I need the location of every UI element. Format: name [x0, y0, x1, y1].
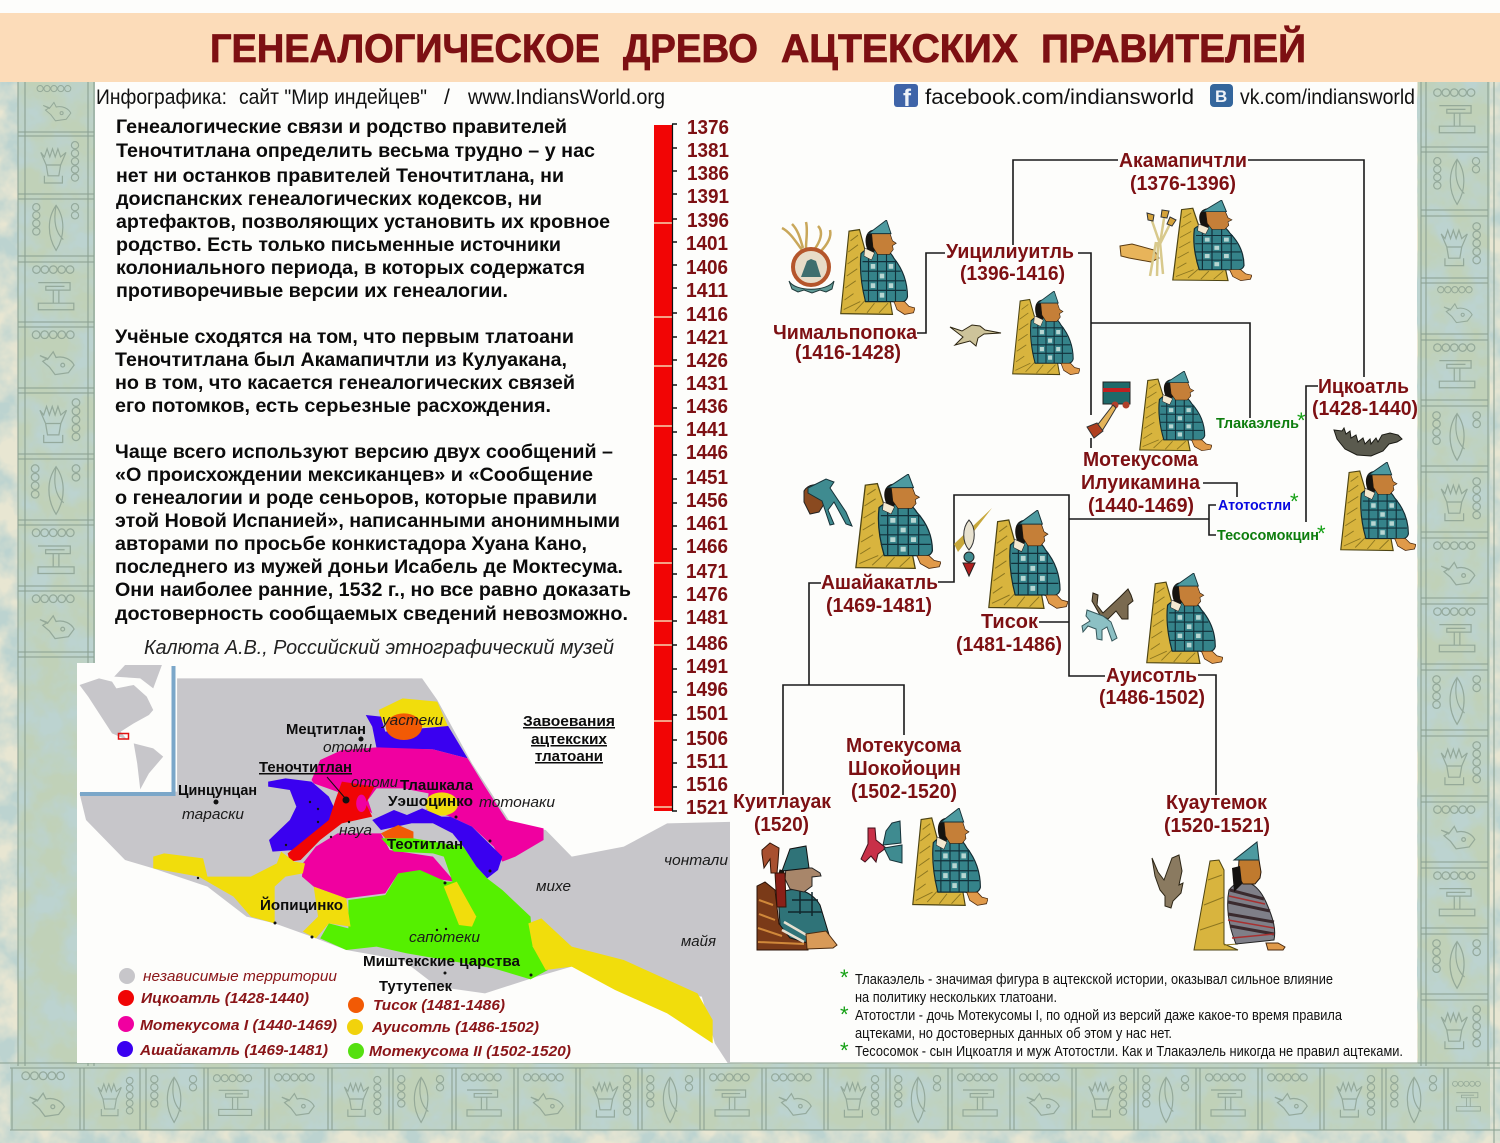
social links [894, 84, 1415, 112]
paragraph 1: Генеалогические связи и родство правителей [116, 117, 567, 138]
city labels: Теночтитлан [259, 759, 352, 776]
icon: facebook [894, 84, 918, 112]
icon: face with water [804, 479, 852, 526]
timeline years: 1521 [686, 797, 728, 819]
timeline years: 1441 [686, 419, 728, 441]
ruler: Itzcoatl: (1428-1440) [1312, 398, 1418, 420]
icon: hummingbird [950, 325, 1001, 346]
icon: diadem and arrow [1087, 382, 1130, 438]
timeline years: 1491 [686, 656, 728, 678]
Ahuitzotl territory: Huexotzinco [425, 792, 458, 816]
timeline years: 1391 [687, 186, 729, 208]
figure: seated ruler [841, 220, 915, 314]
sibling: Atotoztli: Атотостли [1218, 498, 1291, 514]
city labels: Теотитлан [387, 836, 463, 853]
ruler: Tizoc: Тисок [981, 611, 1039, 633]
sibling: Tezozomoctzin [1217, 521, 1326, 546]
icon: smoking shield [782, 222, 834, 293]
timeline years: 1396 [687, 210, 729, 232]
Ahuitzotl territory: isthmus [444, 882, 476, 927]
ruler: Tizoc: (1481-1486) [956, 634, 1062, 656]
title: ДРЕВО [623, 27, 758, 71]
footnotes: * [840, 1038, 849, 1063]
paragraph 2 [115, 327, 575, 417]
figure: seated ruler [1173, 200, 1252, 281]
timeline years: 1376 [687, 117, 729, 139]
ruler: Motecuhzoma Xocoyotzin: Мотекусома [846, 735, 962, 757]
source line: сайт "Мир индейцев" [239, 86, 427, 109]
independent land [80, 678, 740, 1070]
paragraph 3: этой Новой Испанией», написанными анонимными [115, 511, 620, 532]
footnotes: Тлакаэлель - значимая фигура в ацтекской истории, оказывал сильное влияние [855, 972, 1333, 988]
people labels: майя [681, 933, 716, 950]
author credit: Калюта А.В., Российский этнографический музей [144, 637, 614, 659]
ruler: Cuauhtemoc: Куаутемок [1166, 792, 1268, 814]
timeline years: 1511 [686, 751, 728, 773]
timeline [654, 117, 729, 819]
people labels: отоми [351, 774, 399, 791]
timeline years: 1431 [686, 373, 728, 395]
icon: vk [1210, 84, 1233, 107]
ruler: Acamapichtli: (1376-1396) [1130, 173, 1236, 195]
timeline years: 1401 [686, 233, 728, 255]
icon: facebook: f [903, 85, 912, 112]
paragraph 2: Учёные сходятся на том, что первым тлатоани [115, 327, 574, 348]
title [210, 25, 1306, 71]
family tree connector lines [783, 160, 1364, 795]
figure: seated ruler [1341, 462, 1416, 550]
timeline years: 1481 [686, 607, 728, 629]
ruler: Huitzilihuitl [946, 241, 1080, 375]
paragraph 2: его потомков, есть серьезные расхождения. [115, 396, 551, 417]
timeline years: 1426 [686, 350, 728, 372]
ruler: Chimalpopoca [773, 220, 918, 364]
ruler: Chimalpopoca: Чимальпопока [773, 322, 918, 344]
map legend [117, 968, 571, 1060]
city labels: Миштекские царства [363, 953, 521, 970]
map legend: Ашайакатль (1469-1481) [139, 1042, 328, 1059]
ruler: Axayacatl [804, 474, 941, 617]
timeline years: 1436 [686, 396, 728, 418]
timeline years: 1451 [686, 467, 728, 489]
city labels: Тлашкала [400, 777, 474, 794]
ruler: Axayacatl: Ашайакатль [821, 572, 938, 594]
figure: seated ruler [1013, 291, 1080, 375]
ruler: Acamapichtli: Акамапичтли [1119, 150, 1247, 172]
people labels [182, 712, 729, 950]
Tizoc territory: centre [381, 825, 413, 838]
city labels: Цинцунцан [178, 782, 257, 799]
timeline years: 1386 [687, 163, 729, 185]
icon: obsidian serpent [1334, 428, 1402, 456]
timeline years: 1516 [686, 774, 728, 796]
ruler: Acamapichtli [1119, 150, 1252, 281]
paragraph 2: Теночтитлана был Акамапичтли из Кулуакана, [115, 350, 567, 371]
ruler: Huitzilihuitl: Уицилиуитль [946, 241, 1074, 263]
sibling: Tezozomoctzin: * [1317, 521, 1326, 546]
source line: / [444, 86, 450, 109]
figure: seated ruler [856, 474, 941, 568]
ruler: Chimalpopoca: (1416-1428) [795, 342, 901, 364]
source line: Инфографика: [96, 86, 227, 109]
timeline years: 1476 [686, 584, 728, 606]
sibling: Tlacaelel: * [1297, 408, 1306, 433]
title band [0, 13, 1500, 82]
paragraph 1: нет ни останков правителей Теночтитлана, ни [116, 166, 564, 187]
icon: hand holding reeds [1120, 210, 1176, 276]
sibling: Atotoztli [1218, 489, 1299, 514]
ruler: Motecuhzoma Ilhuicamina: (1440-1469) [1088, 495, 1194, 517]
sibling: Tlacaelel: Тлакаэлель [1216, 416, 1299, 432]
figure: ruler in striped cloak [1194, 842, 1285, 950]
map heading: тлатоани [535, 748, 603, 765]
footnotes: * [840, 965, 849, 990]
timeline years: 1471 [686, 561, 728, 583]
title: ПРАВИТЕЛЕЙ [1041, 25, 1306, 71]
paragraph 3: о генеалогии и роде сеньоров, которые правили [115, 488, 597, 509]
icon: vk: В [1215, 87, 1227, 106]
map legend: Мотекусома I (1440-1469) [140, 1017, 337, 1034]
social links: facebook.com/indiansworld [925, 86, 1194, 109]
icon: descending eagle [1152, 855, 1183, 908]
sibling: Atotoztli: * [1290, 489, 1299, 514]
map legend: Мотекусома II (1502-1520) [369, 1043, 571, 1060]
Motecuhzoma II territory [320, 838, 548, 979]
city labels: Уэшоцинко [388, 793, 473, 810]
Ahuitzotl territory: north [379, 698, 448, 728]
source line: www.IndiansWorld.org [467, 86, 665, 109]
ruler: Motecuhzoma Xocoyotzin: (1502-1520) [851, 781, 957, 803]
timeline years: 1406 [686, 257, 728, 279]
timeline years: 1456 [686, 490, 728, 512]
map legend: Тисок (1481-1486) [373, 997, 505, 1014]
Oaxaca independent enclave [411, 823, 454, 836]
paragraph 3 [115, 442, 631, 625]
footnotes: на политику нескольких тлатоани. [855, 990, 1057, 1006]
timeline years: 1421 [686, 327, 728, 349]
timeline years: 1501 [686, 703, 728, 725]
timeline years: 1486 [686, 633, 728, 655]
icon: diadem and nose ornament [861, 821, 902, 863]
ruler: Motecuhzoma Xocoyotzin: Шокойоцин [848, 758, 961, 780]
ruler: Cuitlahuac: (1520) [754, 814, 809, 836]
ruler: Cuitlahuac [733, 791, 837, 950]
footnotes: ацтеками, но достоверных данных об этом у нас нет. [855, 1026, 1172, 1042]
ruler: Ahuitzotl: (1486-1502) [1099, 687, 1205, 709]
city markers [197, 736, 533, 976]
people labels: науа [339, 822, 372, 839]
paragraph 1: артефактов, позволяющих установить их кровное [116, 212, 610, 233]
ruler: Huitzilihuitl: (1396-1416) [960, 263, 1065, 285]
ruler: Motecuhzoma Ilhuicamina: Мотекусома [1083, 449, 1199, 471]
sibling: Tezozomoctzin: Тесосомокцин [1217, 528, 1319, 544]
Tlaxcala independent enclave [368, 788, 429, 817]
city labels [178, 721, 521, 995]
timeline years [686, 117, 729, 819]
figure: seated ruler [1140, 371, 1212, 451]
ruler: Ahuitzotl: Ауисотль [1106, 665, 1197, 687]
source line [96, 86, 665, 109]
paragraph 1 [116, 117, 610, 302]
timeline years: 1461 [686, 513, 728, 535]
icon: water beast [1082, 589, 1133, 641]
paragraph 3: Они наиболее ранние, 1532 г., но все равно доказать [115, 580, 631, 601]
people labels: тараски [182, 806, 245, 823]
paragraph 3: авторами по просьбе конкистадора Хуана Кано, [115, 534, 587, 555]
figure: seated ruler [989, 510, 1068, 608]
ruler: Cuauhtemoc: (1520-1521) [1164, 815, 1270, 837]
map heading: ацтекских [531, 731, 608, 748]
paragraph 3: достоверность сообщаемых сведений невозможно. [115, 604, 628, 625]
paragraph 1: доиспанских генеалогических кодексов, ни [116, 189, 542, 210]
ruler: Itzcoatl [1312, 376, 1418, 550]
figure: seated ruler [913, 808, 988, 905]
Tizoc territory: north [386, 713, 422, 740]
timeline years: 1411 [686, 280, 728, 302]
paragraph 3: «О происхождении мексиканцев» и «Сообщение [115, 465, 593, 486]
icon: pierced leg [954, 508, 992, 576]
ruler: Tizoc [954, 508, 1068, 656]
paragraph 1: противоречивые версии их генеалогии. [116, 281, 508, 302]
paragraph 3: Чаще всего используют версию двух сообщений – [115, 442, 613, 463]
footnotes: Тесосомок - сын Ицкоатля и муж Атотостли. Как и Тлакаэлель никогда не правил ацтеками. [855, 1044, 1403, 1060]
timeline years: 1416 [686, 304, 728, 326]
paragraph 1: Теночтитлана определить весьма трудно – у нас [116, 141, 595, 162]
city labels: Тутутепек [379, 978, 452, 995]
footnotes [840, 965, 1403, 1063]
map heading [523, 713, 615, 765]
ruler: Itzcoatl: Ицкоатль [1318, 376, 1409, 398]
ruler: Motecuhzoma Xocoyotzin [846, 735, 988, 905]
intro text [115, 117, 631, 659]
Axayacatl territory: north [366, 715, 468, 758]
map legend: Ицкоатль (1428-1440) [141, 990, 309, 1007]
Motecuhzoma I territory: south [302, 833, 455, 898]
people labels: отоми [323, 739, 373, 756]
Axayacatl territory: west [268, 778, 338, 852]
map panel [77, 663, 740, 1070]
map heading: Завоевания [523, 713, 615, 730]
paragraph 3: последнего из мужей доньи Исабель де Моктесума. [115, 557, 623, 578]
people labels: уастеки [381, 712, 444, 729]
ruler: Motecuhzoma Ilhuicamina: Илуикамина [1081, 472, 1201, 494]
ruler: Ahuitzotl [1082, 573, 1223, 709]
people labels: чонтали [664, 852, 729, 869]
timeline years: 1381 [687, 140, 729, 162]
city labels: Йопицинко [260, 896, 343, 914]
timeline bar [654, 124, 677, 811]
timeline years: 1446 [686, 442, 728, 464]
Motecuhzoma I territory: north [312, 747, 544, 862]
figure: seated ruler with dark throne [757, 843, 837, 950]
paragraph 1: колониального периода, в которых содержатся [116, 258, 585, 279]
footnotes: * [840, 1002, 849, 1027]
timeline years: 1466 [686, 536, 728, 558]
paragraph 1: родство. Есть только письменные источники [116, 235, 561, 256]
timeline years: 1496 [686, 679, 728, 701]
timeline years: 1506 [686, 728, 728, 750]
footnotes: Атотостли - дочь Мотекусомы I, по одной из версий даже какое-то время правила [855, 1008, 1343, 1024]
ruler: Axayacatl: (1469-1481) [826, 595, 932, 617]
people labels: сапотеки [409, 929, 481, 946]
Itzcoatl territory [288, 782, 374, 862]
people labels: михе [536, 878, 571, 895]
city labels: Мецтитлан [286, 721, 366, 738]
title: АЦТЕКСКИХ [781, 27, 1018, 71]
ruler: Cuitlahuac: Куитлауак [733, 791, 832, 813]
map territories [80, 678, 740, 1070]
people labels: тотонаки [479, 794, 556, 811]
ruler: Motecuhzoma Ilhuicamina [1081, 371, 1212, 517]
sibling: Tlacaelel [1216, 408, 1306, 433]
figure: seated ruler [1147, 573, 1223, 663]
paragraph 2: но в том, что касается генеалогических связей [115, 373, 575, 394]
title: ГЕНЕАЛОГИЧЕСКОЕ [210, 27, 600, 71]
Axayacatl territory: belt [372, 808, 502, 878]
social links: vk.com/indiansworld [1240, 86, 1415, 109]
map legend: независимые территории [143, 968, 338, 985]
inset world map [77, 663, 174, 794]
map legend: Ауисотль (1486-1502) [371, 1019, 539, 1036]
ruler: Cuauhtemoc [1152, 792, 1285, 950]
